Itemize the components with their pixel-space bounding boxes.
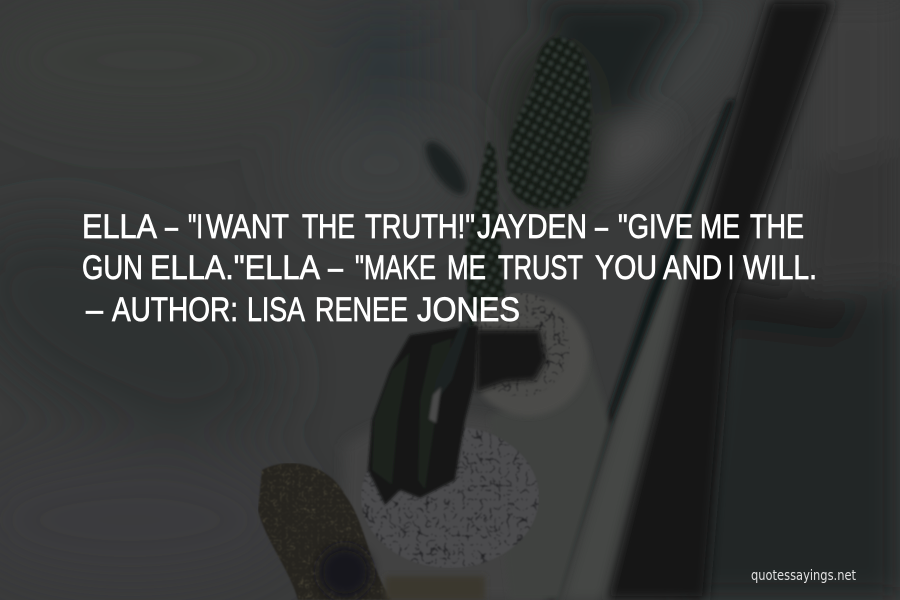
upper pot dark soil xyxy=(476,330,546,392)
quote line 2: ELLA."ELLA xyxy=(150,249,320,287)
quote line 1: – xyxy=(595,208,608,246)
quote line 2: ME xyxy=(447,249,486,287)
quote line 1: THE xyxy=(302,208,355,246)
small spiny brown cactus xyxy=(258,463,392,600)
quote line 1: ME xyxy=(700,208,740,246)
big dotted cactus xyxy=(507,37,591,209)
quote line 2: "MAKE xyxy=(355,249,436,287)
tall dark cactus xyxy=(368,322,478,505)
quote line 1: THE xyxy=(750,208,804,246)
lower pot gravel xyxy=(361,426,539,568)
quote line 2: GUN xyxy=(82,249,143,287)
quote line 2: YOU xyxy=(595,249,657,287)
quote line 1 xyxy=(82,208,804,246)
tall thin cactus xyxy=(465,142,505,340)
author line: – xyxy=(86,291,103,329)
quote line 2: I xyxy=(728,249,734,287)
watermark: quotessayings.net xyxy=(751,568,856,584)
author line: AUTHOR: xyxy=(112,291,238,329)
quote text xyxy=(82,208,817,329)
light strip beside band xyxy=(567,196,704,600)
lower pot body xyxy=(348,420,506,592)
quote line 1: ELLA xyxy=(82,208,157,246)
dark vertical band xyxy=(604,0,834,600)
author line xyxy=(86,291,520,329)
thin black stripe xyxy=(545,100,735,600)
quote line 1: JAYDEN xyxy=(477,208,587,246)
background shading: right side xyxy=(704,267,900,600)
small dark cactus xyxy=(423,139,469,197)
upper foliage xyxy=(503,0,700,220)
quote line 2 xyxy=(82,249,817,287)
quote line 2: – xyxy=(328,249,343,287)
brown planter edge xyxy=(385,576,485,600)
quote line 1: "I xyxy=(188,208,203,246)
quote line 1: WANT xyxy=(206,208,289,246)
author line: JONES xyxy=(417,291,520,329)
author line: LISA xyxy=(247,291,305,329)
author line: RENEE xyxy=(315,291,408,329)
quote line 1: TRUTH!" xyxy=(365,208,475,246)
quote line 1: – xyxy=(165,208,178,246)
quote line 2: TRUST xyxy=(498,249,583,287)
quote line 2: AND xyxy=(663,249,722,287)
quote line 1: "GIVE xyxy=(618,208,693,246)
background shading: left wall xyxy=(0,24,422,419)
quote line 2: WILL. xyxy=(743,249,817,287)
upper pot xyxy=(468,293,588,416)
